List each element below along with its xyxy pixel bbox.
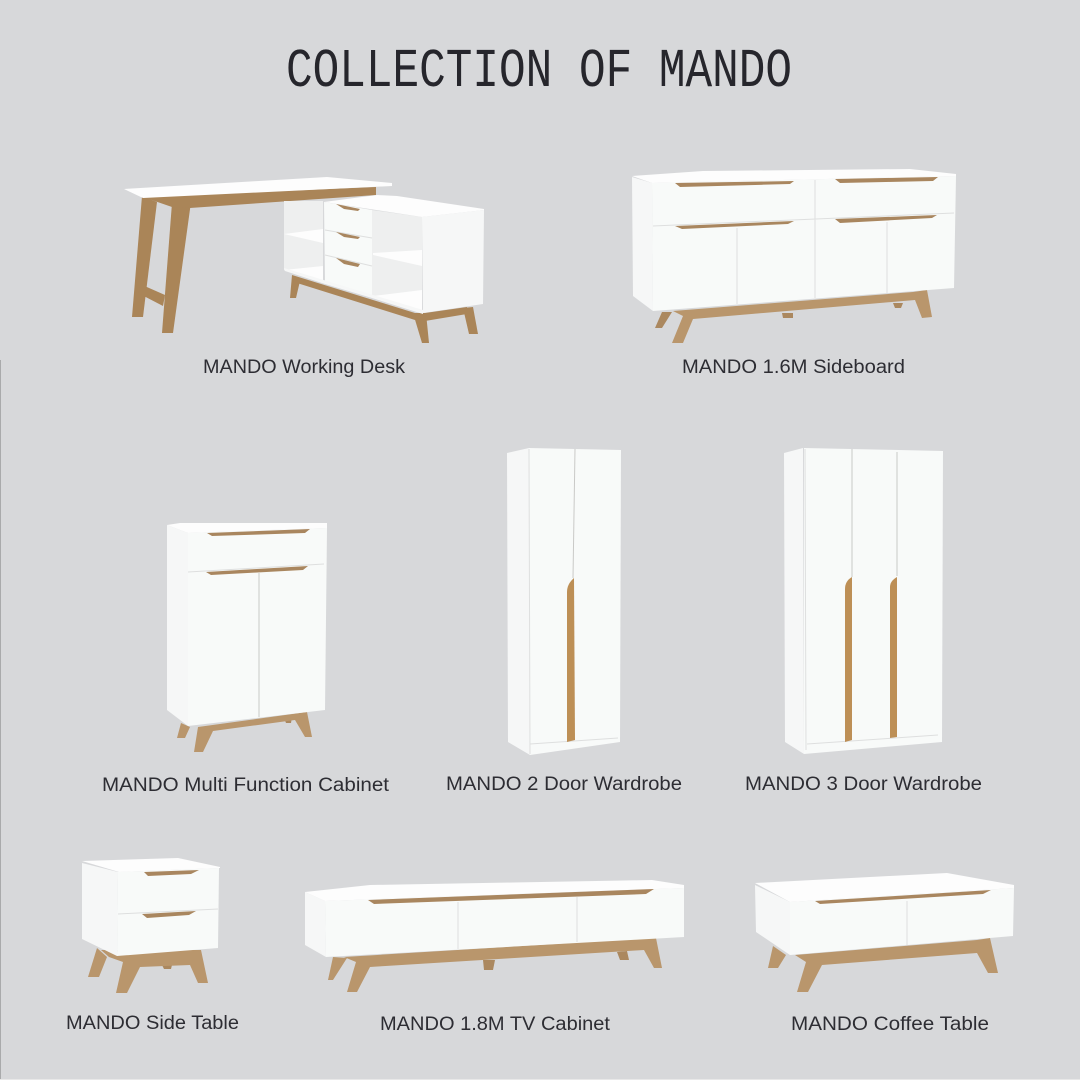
caption: sideboard: MANDO 1.6M Sideboard [682,357,905,378]
product: 3 door wardrobe [784,448,943,754]
caption: working desk: MANDO Working Desk [203,357,406,378]
caption: coffee table: MANDO Coffee Table [791,1014,989,1035]
caption: tv cabinet: MANDO 1.8M TV Cabinet [380,1014,611,1035]
product: working desk [124,177,484,343]
caption: 2 door wardrobe: MANDO 2 Door Wardrobe [446,774,682,795]
product: tv cabinet [305,880,684,992]
product: multi function cabinet [167,523,327,752]
product: sideboard [632,169,956,343]
product: side table [82,858,220,993]
title: COLLECTION OF MANDO [286,40,792,103]
product: coffee table [755,873,1014,992]
caption: side table: MANDO Side Table [66,1013,239,1034]
caption: 3 door wardrobe: MANDO 3 Door Wardrobe [745,774,982,795]
caption: multi function cabinet: MANDO Multi Function Cabinet [102,775,390,796]
product: 2 door wardrobe [507,448,621,755]
